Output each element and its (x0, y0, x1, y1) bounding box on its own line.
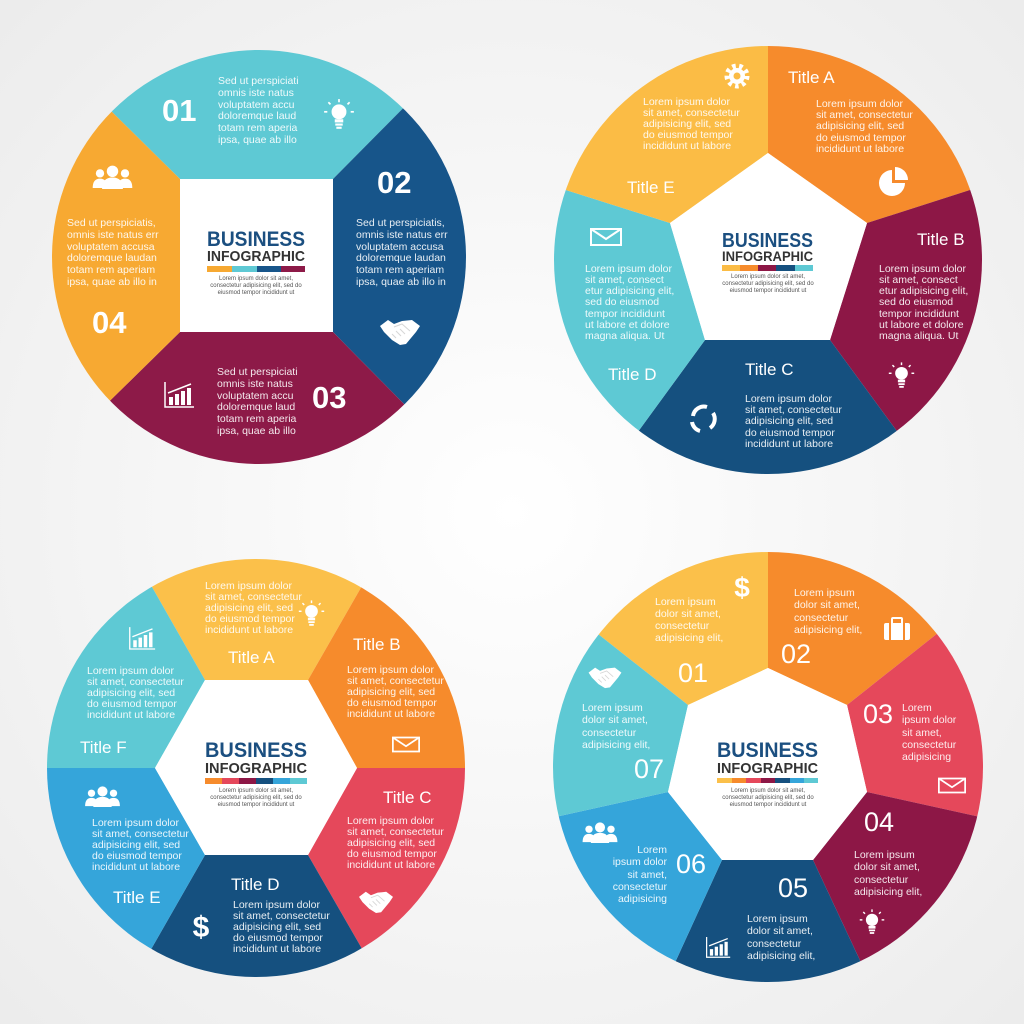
text C (745, 393, 842, 450)
segment 02 (768, 552, 937, 705)
icon: chart 05 (707, 937, 730, 957)
title B: Title B (353, 635, 401, 654)
text E: Lorem ipsum dolor (643, 96, 730, 108)
segment 01 (598, 552, 768, 705)
center title 3 (205, 739, 307, 808)
text C: incididunt ut labore (745, 438, 833, 450)
text D: do eiusmod tempor (233, 932, 323, 944)
text B: magna aliqua. Ut (879, 330, 958, 342)
text D: sed do eiusmod (585, 296, 659, 308)
text 04 (67, 217, 159, 288)
icon: bulb 04 (860, 909, 884, 934)
text 06 (613, 844, 668, 905)
segment 03 (847, 634, 983, 816)
icon: bulb B (889, 362, 914, 388)
icon: people 06 (583, 822, 617, 843)
text 02: omnis iste natus err (356, 229, 448, 241)
text 02: doloremque laudan (356, 252, 446, 264)
text B: etur adipisicing elit, (879, 285, 968, 297)
text 06: ipsum dolor (613, 856, 667, 868)
text E (643, 96, 740, 152)
center title 1: eiusmod tempor incididunt ut (218, 290, 295, 296)
text F (87, 665, 184, 721)
text A (816, 98, 913, 155)
icon: dollar 01: $ (734, 572, 750, 603)
text 01: omnis iste natus (218, 87, 294, 99)
title D: Title D (608, 365, 656, 384)
center title 4: Lorem ipsum dolor sit amet, (731, 788, 805, 794)
title C: Title C (745, 360, 794, 379)
text 07: consectetur (582, 727, 637, 739)
number 05: 05 (778, 873, 808, 903)
text 01: totam rem aperia (218, 122, 298, 134)
segment D (554, 190, 705, 430)
text 01: doloremque laud (218, 110, 296, 122)
text C: Lorem ipsum dolor (745, 393, 832, 405)
text D: incididunt ut labore (233, 943, 321, 955)
center title 2: Lorem ipsum dolor sit amet, (731, 274, 805, 280)
text C: adipisicing elit, sed (745, 415, 833, 427)
text 07: adipisicing elit, (582, 739, 650, 751)
text A: Lorem ipsum dolor (816, 98, 903, 110)
center title 3: BUSINESS (205, 739, 307, 762)
text 03: sit amet, (902, 727, 942, 739)
text 03: Lorem (902, 702, 932, 714)
center title 1: INFOGRAPHIC (207, 248, 305, 265)
text C: do eiusmod tempor (745, 427, 835, 439)
text 01 (218, 75, 299, 146)
text 02: adipisicing elit, (794, 624, 862, 636)
segment 03 (110, 332, 404, 464)
text E: do eiusmod tempor (92, 850, 182, 862)
text 05 (747, 913, 815, 962)
text 05: Lorem ipsum (747, 913, 808, 925)
text A: sit amet, consectetur (205, 591, 302, 603)
number 01: 01 (162, 93, 196, 128)
text 04: voluptatem accusa (67, 241, 155, 253)
center title 4: consectetur adipisicing elit, sed do (722, 795, 814, 801)
segment 05 (676, 860, 860, 982)
center hexagon (155, 680, 357, 855)
chart 3: hexagon circle (47, 559, 465, 977)
text E: adipisicing elit, sed (643, 118, 731, 130)
text A: adipisicing elit, sed (816, 120, 904, 132)
center title 1: BUSINESS (207, 228, 305, 251)
text D: adipisicing elit, sed (233, 921, 321, 933)
number 04: 04 (92, 305, 127, 340)
text D: ut labore et dolore (585, 319, 670, 331)
text D: etur adipisicing elit, (585, 285, 674, 297)
text D (585, 263, 674, 342)
text B: sed do eiusmod (879, 296, 953, 308)
text A: do eiusmod tempor (205, 613, 295, 625)
text 06: consectetur (613, 881, 668, 893)
text C: sit amet, consectetur (745, 404, 842, 416)
text E: adipisicing elit, sed (92, 839, 180, 851)
text 01: Sed ut perspiciati (218, 75, 299, 87)
icon: gear (727, 66, 747, 86)
text C: do eiusmod tempor (347, 848, 437, 860)
number 02: 02 (377, 165, 411, 200)
text E: sit amet, consectetur (643, 107, 740, 119)
segment D (151, 855, 362, 977)
number 03: 03 (863, 699, 893, 729)
text C (347, 815, 444, 871)
segment F (47, 586, 205, 768)
text 02: Lorem ipsum (794, 587, 855, 599)
text B: incididunt ut labore (347, 708, 435, 720)
text F: incididunt ut labore (87, 709, 175, 721)
text E: do eiusmod tempor (643, 129, 733, 141)
text B: sit amet, consectetur (347, 675, 444, 687)
center heptagon (668, 668, 867, 860)
text 01: voluptatem accu (218, 99, 295, 111)
text 02: Sed ut perspiciatis, (356, 217, 445, 229)
center title 4: eiusmod tempor incididunt ut (730, 802, 807, 808)
icon: bulb A (299, 600, 324, 626)
text E (92, 817, 189, 873)
text 02: consectetur (794, 612, 849, 624)
center title 4: INFOGRAPHIC (717, 760, 818, 777)
text 03: ipsum dolor (902, 714, 957, 726)
title D: Title D (231, 875, 280, 894)
title A: Title A (228, 648, 275, 667)
text 02 (794, 587, 862, 636)
text 02: totam rem aperiam (356, 264, 444, 276)
segment 01 (112, 50, 403, 179)
text E: Lorem ipsum dolor (92, 817, 179, 829)
icon: envelope 03 (939, 778, 965, 792)
text B: Lorem ipsum dolor (879, 263, 966, 275)
icon: briefcase (884, 618, 910, 640)
text 01: dolor sit amet, (655, 608, 721, 620)
center title 1: consectetur adipisicing elit, sed do (210, 283, 302, 289)
icon: envelope B (393, 738, 419, 752)
text 03: Sed ut perspiciati (217, 366, 298, 378)
center title 3: consectetur adipisicing elit, sed do (210, 795, 302, 801)
icon: chart F (130, 627, 155, 649)
center pentagon (670, 153, 867, 340)
text A: sit amet, consectetur (816, 109, 913, 121)
segment 06 (558, 792, 722, 962)
center title 3: eiusmod tempor incididunt ut (218, 802, 295, 808)
text 03: consectetur (902, 739, 957, 751)
text F: sit amet, consectetur (87, 676, 184, 688)
segment E (47, 768, 205, 949)
number 03: 03 (312, 380, 346, 415)
text 01: ipsa, quae ab illo (218, 134, 297, 146)
segment B (830, 190, 982, 431)
chart 4: heptagon circle (553, 552, 983, 982)
text B: sit amet, consect (879, 274, 958, 286)
title B: Title B (917, 230, 965, 249)
number 07: 07 (634, 754, 664, 784)
text 03: adipisicing (902, 751, 951, 763)
text 04: ipsa, quae ab illo in (67, 276, 157, 288)
segment C (638, 340, 897, 474)
text 01: adipisicing elit, (655, 632, 723, 644)
center title 4: BUSINESS (717, 739, 818, 762)
text 03: ipsa, quae ab illo (217, 425, 296, 437)
segment C (308, 768, 465, 948)
text 04: Sed ut perspiciatis, (67, 217, 156, 229)
icon: people E (85, 786, 120, 807)
text 05: dolor sit amet, (747, 925, 813, 937)
text 04: omnis iste natus err (67, 229, 159, 241)
text 03: omnis iste natus (217, 378, 293, 390)
text B (347, 664, 444, 720)
chart 2: pentagon circle (554, 46, 982, 474)
text D: tempor incididunt (585, 308, 665, 320)
center title 4 (717, 739, 818, 808)
text 03: totam rem aperia (217, 413, 297, 425)
center title 2: eiusmod tempor incididunt ut (730, 288, 807, 294)
text A: do eiusmod tempor (816, 132, 906, 144)
icon: envelope D (591, 229, 621, 245)
center title 2: INFOGRAPHIC (722, 248, 813, 264)
text B (879, 263, 968, 342)
text 04: doloremque laudan (67, 252, 157, 264)
segment E (566, 46, 768, 223)
segment 04 (52, 112, 180, 400)
text D: sit amet, consectetur (233, 910, 330, 922)
text 07: dolor sit amet, (582, 714, 648, 726)
text 02: dolor sit amet, (794, 599, 860, 611)
title E: Title E (113, 888, 161, 907)
text F: Lorem ipsum dolor (87, 665, 174, 677)
text B: ut labore et dolore (879, 319, 964, 331)
segment A (152, 559, 362, 680)
text B: Lorem ipsum dolor (347, 664, 434, 676)
icon: handshake C (359, 892, 393, 913)
text A: incididunt ut labore (816, 143, 904, 155)
icon: handshake (380, 320, 420, 345)
segment A (768, 46, 970, 223)
text C: adipisicing elit, sed (347, 837, 435, 849)
icon: handshake 07 (589, 668, 621, 688)
text 07: Lorem ipsum (582, 702, 643, 714)
text D (233, 899, 330, 955)
text F: adipisicing elit, sed (87, 687, 175, 699)
text 04: Lorem ipsum (854, 849, 915, 861)
text E: incididunt ut labore (643, 140, 731, 152)
segment 07 (553, 634, 688, 816)
text D: magna aliqua. Ut (585, 330, 664, 342)
center title 2: BUSINESS (722, 230, 813, 252)
text E: sit amet, consectetur (92, 828, 189, 840)
text 07 (582, 702, 650, 751)
icon: people (93, 166, 132, 189)
center title 1: Lorem ipsum dolor sit amet, (219, 276, 293, 282)
text 04 (854, 849, 922, 898)
title F: Title F (80, 738, 127, 757)
text A (205, 580, 302, 636)
text 02: ipsa, quae ab illo in (356, 276, 446, 288)
text D: sit amet, consect (585, 274, 664, 286)
text C: incididunt ut labore (347, 859, 435, 871)
text 06: Lorem (637, 844, 667, 856)
text B: do eiusmod tempor (347, 697, 437, 709)
text B: tempor incididunt (879, 308, 959, 320)
text B: adipisicing elit, sed (347, 686, 435, 698)
text 03: voluptatem accu (217, 390, 294, 402)
center title 1 (207, 228, 305, 296)
text C: Lorem ipsum dolor (347, 815, 434, 827)
chart 1: four-step circle (52, 50, 466, 464)
text D: Lorem ipsum dolor (233, 899, 320, 911)
icon: dollar D: $ (193, 911, 210, 944)
title A: Title A (788, 68, 835, 87)
segment B (308, 587, 465, 768)
title C: Title C (383, 788, 432, 807)
text A: incididunt ut labore (205, 624, 293, 636)
number 06: 06 (676, 849, 706, 879)
icon: refresh (692, 407, 715, 431)
text 03: doloremque laud (217, 401, 295, 413)
center title 3: INFOGRAPHIC (205, 760, 307, 777)
center title 2: consectetur adipisicing elit, sed do (722, 281, 814, 287)
text A: adipisicing elit, sed (205, 602, 293, 614)
text 04: consectetur (854, 874, 909, 886)
segment 02 (333, 108, 466, 404)
number 01: 01 (678, 658, 708, 688)
text F: do eiusmod tempor (87, 698, 177, 710)
text 04: adipisicing elit, (854, 886, 922, 898)
icon: bulb (324, 99, 354, 129)
text A: Lorem ipsum dolor (205, 580, 292, 592)
text 03 (902, 702, 957, 763)
text 02 (356, 217, 448, 288)
center title 3: Lorem ipsum dolor sit amet, (219, 788, 293, 794)
text 06: sit amet, (627, 869, 667, 881)
icon: pie (879, 167, 908, 196)
title E: Title E (627, 178, 675, 197)
text 04: totam rem aperiam (67, 264, 155, 276)
text 04: dolor sit amet, (854, 861, 920, 873)
icon: chart (165, 382, 194, 407)
number 04: 04 (864, 807, 894, 837)
center title 2 (722, 230, 814, 294)
text 06: adipisicing (618, 893, 667, 905)
center square (180, 179, 333, 332)
text D: Lorem ipsum dolor (585, 263, 672, 275)
text 05: consectetur (747, 938, 802, 950)
text 01: Lorem ipsum (655, 596, 716, 608)
text 05: adipisicing elit, (747, 950, 815, 962)
text E: incididunt ut labore (92, 861, 180, 873)
text 02: voluptatem accusa (356, 241, 444, 253)
text 01: consectetur (655, 620, 710, 632)
number 02: 02 (781, 639, 811, 669)
text 03 (217, 366, 298, 437)
text 01 (655, 596, 723, 644)
segment 04 (813, 792, 978, 962)
text C: sit amet, consectetur (347, 826, 444, 838)
